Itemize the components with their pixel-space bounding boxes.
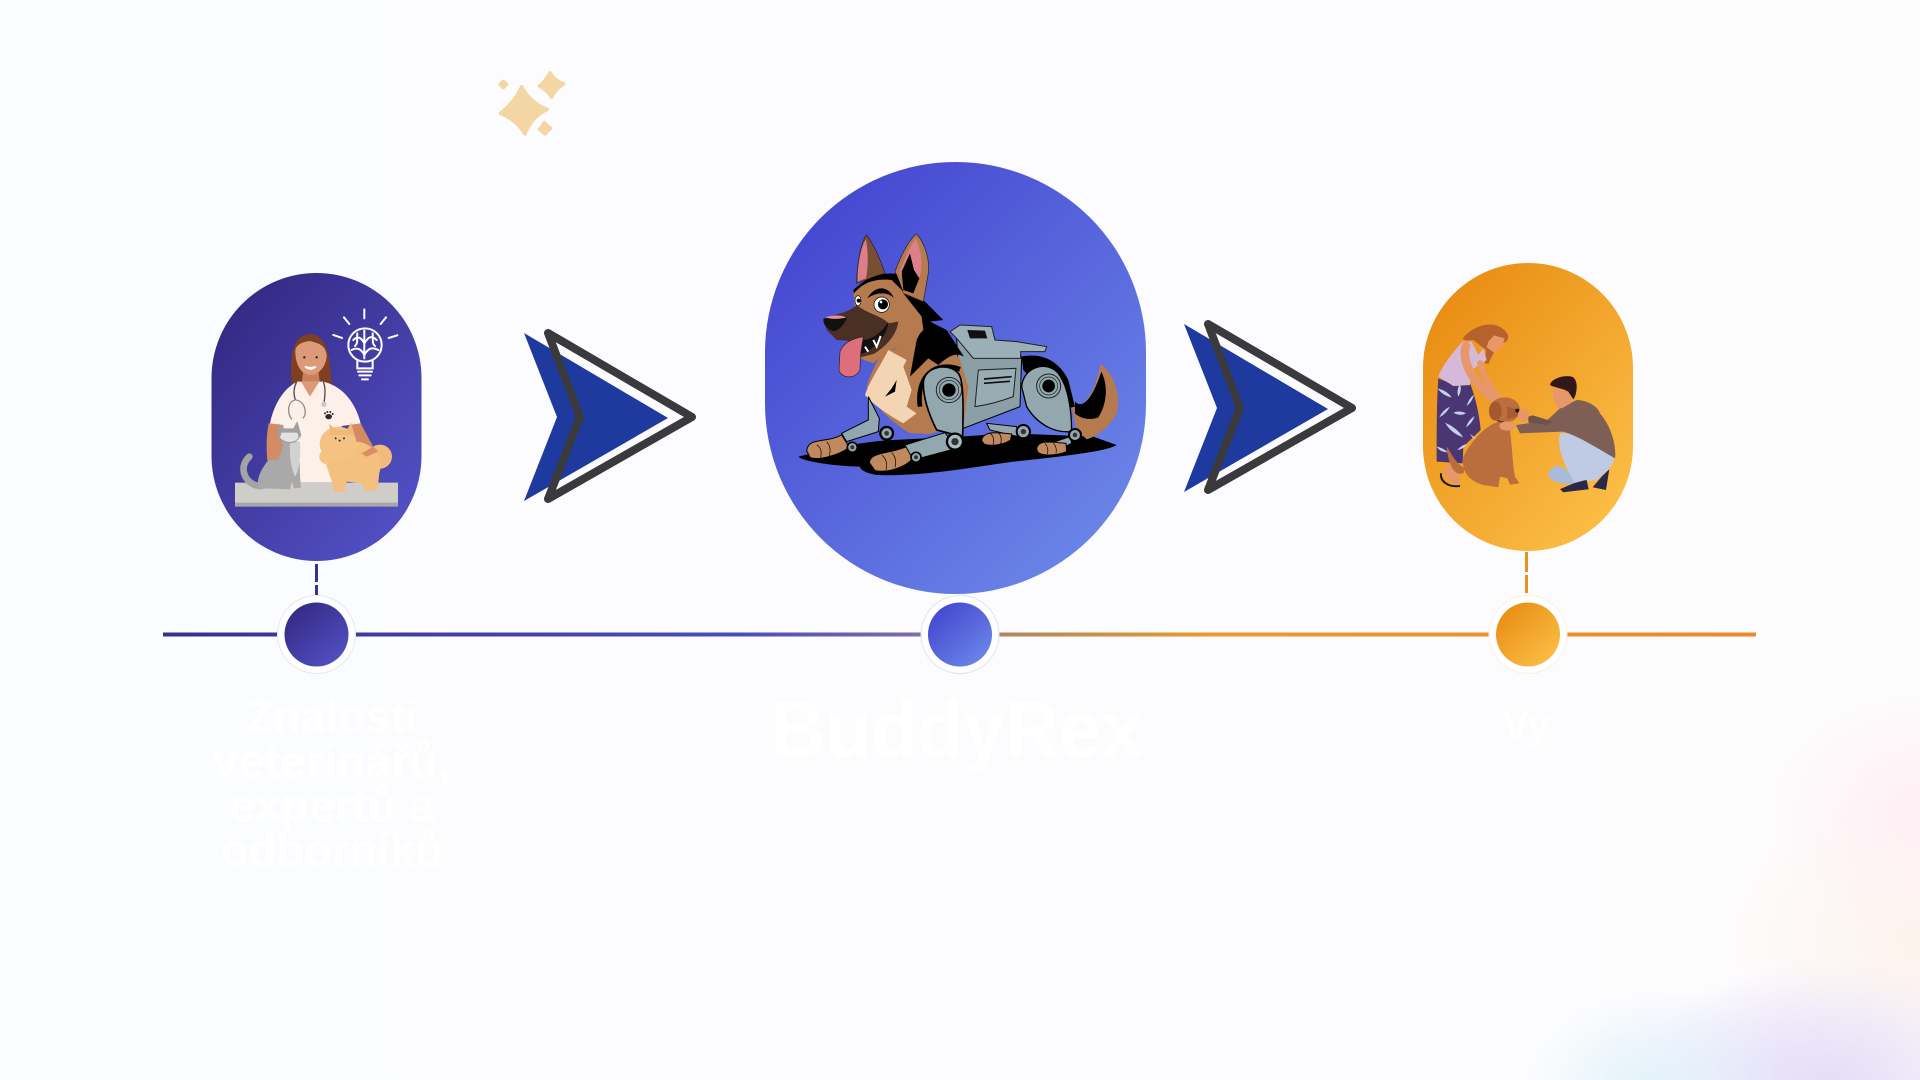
dog: [1447, 447, 1465, 474]
icon: brain bulb: [333, 309, 397, 379]
far hind leg: [987, 423, 1018, 437]
panel: people pill: [1423, 263, 1633, 551]
illustration: couple petting dog: [1437, 324, 1615, 492]
arrow: second: [1184, 324, 1352, 492]
man: [1548, 466, 1575, 484]
head: [853, 275, 923, 363]
icon: sparkles: [500, 73, 564, 134]
near hind paw: [1055, 437, 1072, 447]
near shoulder: [919, 367, 960, 407]
panel: veterinarian pill: [212, 273, 422, 561]
ears: [857, 235, 885, 283]
label: veterinarians' knowledge: expertů a: [230, 780, 435, 831]
arrow: first: [524, 333, 692, 501]
table: [235, 483, 398, 503]
robot torso: [957, 338, 1022, 428]
label: BuddyRex: BuddyRex: [771, 685, 1143, 774]
tan body: [867, 333, 968, 434]
near hip: [1022, 366, 1072, 432]
shadow: [798, 433, 1117, 475]
pomeranian: [368, 445, 392, 469]
cat: [244, 457, 262, 486]
far foreleg: [842, 397, 879, 442]
label: veterinarians' knowledge: veterinářů,: [213, 736, 451, 787]
node: right: [1489, 596, 1567, 674]
tail: [1072, 364, 1118, 439]
near foreleg: [869, 446, 913, 471]
timeline line: [163, 632, 1756, 636]
connector: left dashed: [315, 564, 318, 595]
node: centre: [921, 596, 999, 674]
black mane: [903, 290, 964, 377]
eyes: [874, 297, 889, 312]
nose: [823, 316, 847, 331]
panel: BuddyRex pill: [765, 162, 1146, 594]
label: veterinarians' knowledge: Znalosti: [246, 691, 418, 742]
label: veterinarians' knowledge: [213, 691, 451, 876]
node: left: [278, 596, 356, 674]
woman: [1463, 324, 1508, 364]
illustration: robot dog: [798, 234, 1118, 475]
label: veterinarians' knowledge: odborníků: [221, 825, 443, 876]
mouth & tongue: [858, 322, 888, 354]
illustration: vet with cat and dog: [235, 309, 398, 507]
label: you: Vy: [1502, 702, 1550, 749]
connector: right dashed: [1525, 552, 1528, 593]
